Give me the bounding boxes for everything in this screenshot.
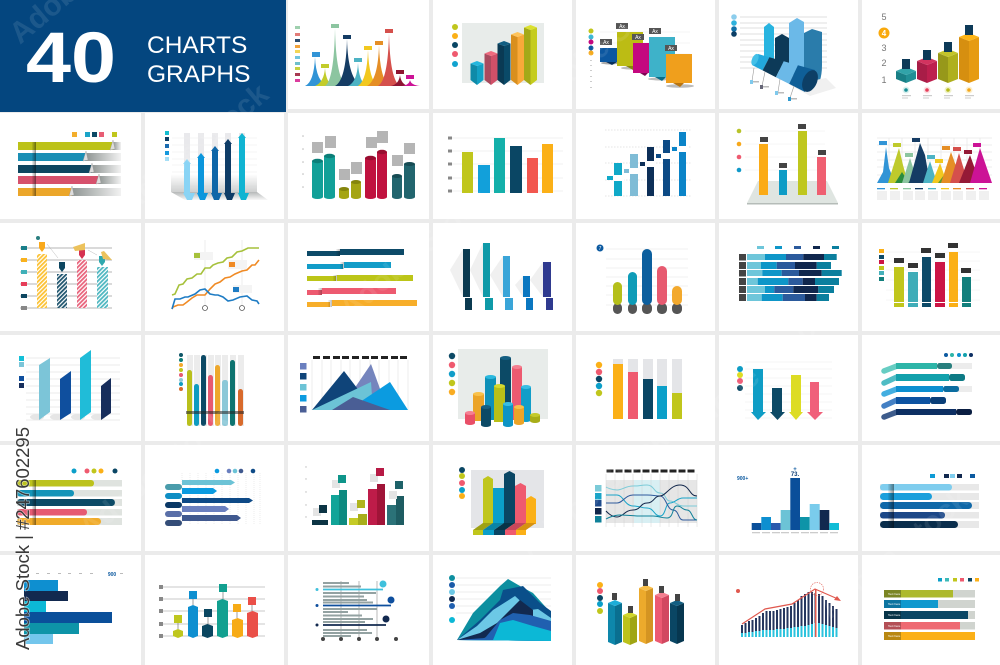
chart 40: progress bars with dark labels: Text here [888,592,901,596]
watermark: faint diagonal stock text: Adobe Stock [333,182,495,325]
chart 6: horizontal bars with curled ends [18,132,121,196]
chart 5: isometric blocks with numbers: 4 [882,29,887,38]
chart 3: ribbon bars with tags: Ax [668,46,674,52]
watermark: faint diagonal stock text: Adobe Stock [73,402,235,545]
chart 38: tall isometric bars [597,579,684,645]
chart 21: tall pills over grey columns [179,353,244,426]
chart 10: bars with floating cards [605,130,692,196]
chart 40: progress bars with dark labels: Text here [888,613,901,617]
chart 29: double 3D columns with tags [305,466,404,525]
chart 37: layered mountain area [449,575,551,641]
chart 32: histogram with highlighted bar: 73. [791,472,800,478]
chart 3: ribbon bars with tags: Ax [652,29,658,35]
chart 18: stacked horizontal bars [739,246,842,301]
chart 19: tagged bars with foot strips [879,243,980,307]
chart 5: isometric blocks with numbers: 1 [881,75,887,85]
chart 17: rounded pill bars with caps: 7 [599,246,602,252]
chart 15: folded horizontal ribbons [307,249,417,307]
chart 27: rounded horizontal bars on strips [17,468,122,525]
chart 13: hatched bars with pins [20,236,112,310]
chart 11: bars on platform [737,124,838,204]
chart 40: progress bars with dark labels [884,578,979,640]
chart 34: horizontal blocks [24,572,123,644]
watermark: faint diagonal stock text: Adobe Stock [813,482,975,625]
chart 7: vertical arrows on 3D floor [165,131,268,200]
chart 8: cylinders with grey tags [302,131,415,199]
chart 34: horizontal blocks: 900 [108,572,116,578]
chart 20: parallelogram bars [19,350,120,420]
chart 4: 3D cylinder and curved bars [731,14,836,101]
stock id text: rotated vertical: Adobe Stock | #247602295 [13,427,33,650]
title banner [0,0,286,112]
chart 12: jagged peak area with grid [877,138,992,200]
chart 14: multi-line chart [172,240,259,310]
chart 9: slightly 3D bars [448,136,563,193]
chart 32: histogram with highlighted bar: + [793,467,797,473]
heading: 40: 40 [26,19,116,98]
watermark: faint diagonal stock text: Adobe Stock [113,77,275,220]
chart 2: 3D bars on grey panel [452,23,544,85]
chart 25: downward arrows [737,362,832,420]
chart 30: bent 3D bars on grey panel [459,467,544,535]
chart 5: isometric blocks with numbers: 3 [881,43,887,53]
chart 40: progress bars with dark labels: Text here [888,624,901,628]
chart 3: ribbon bars with tags: Ax [603,40,609,46]
chart 3: ribbon bars with tags [588,23,694,88]
chart 28: horizontal arrows with stubs [165,469,260,526]
chart 23: grouped 3D cylinders [449,349,548,427]
chart 40: progress bars with dark labels: Text here [888,602,901,606]
chart 16: bars with long shadows and feet [450,243,553,310]
chart 33: horizontal pills with dark band [880,474,979,528]
chart 3: ribbon bars with tags: Ax [635,35,641,41]
chart 35: hexagonal columns with tags [159,584,265,638]
chart 17: rounded pill bars with caps [596,244,688,314]
watermark: faint diagonal stock text: Adobe Stock [673,302,835,445]
chart 32: histogram with highlighted bar: 900+ [737,476,748,482]
watermark: faint diagonal stock text: Adobe Stock [513,422,675,565]
chart 1: peak area chart [295,24,420,86]
chart 26: slanted-stub horizontal ribbons [884,353,973,417]
chart 5: isometric blocks with numbers: 2 [881,58,887,68]
chart 32: histogram with highlighted bar [737,467,839,533]
heading: graphs: GRAPHS [147,61,250,88]
chart 5: isometric blocks with numbers [878,12,979,98]
chart 3: ribbon bars with tags: Ax [619,24,625,30]
chart 36: thin horizontal bars with markers [316,580,398,641]
chart 5: isometric blocks with numbers: 5 [881,12,887,22]
chart 24: filled column gauges [596,359,682,419]
chart 22: overlapping triangle areas [300,356,408,412]
chart 40: progress bars with dark labels: Text here [888,634,901,638]
chart 31: smooth multi-line chart [595,470,697,527]
chart 39: dense bars with trend arrow [736,582,841,637]
heading: charts: CHARTS [147,32,247,59]
